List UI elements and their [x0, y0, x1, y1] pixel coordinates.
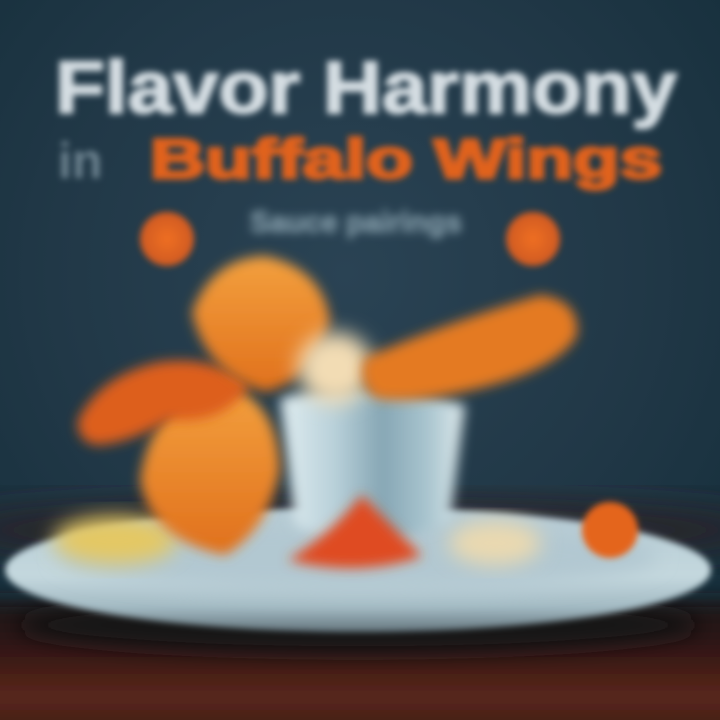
title line two: in: [58, 133, 102, 189]
title line one: Flavor Harmony: [55, 46, 677, 129]
wing lower: [140, 385, 280, 555]
wing right: [362, 295, 577, 400]
icon: right orange dot: [506, 212, 560, 266]
orange garnish: [582, 502, 638, 558]
plate: [5, 508, 711, 653]
title line two: Buffalo Wings: [150, 127, 662, 190]
yellow sauce: [53, 516, 177, 564]
icon: left orange dot: [140, 212, 194, 266]
cream sauce: [449, 521, 541, 565]
table: [0, 600, 720, 720]
wing top: [192, 256, 330, 392]
table far edge: [0, 502, 720, 558]
dip cup: [280, 388, 465, 541]
subtitle: Sauce pairings: [250, 206, 462, 239]
red sauce: [288, 495, 422, 568]
title line two: [58, 127, 662, 190]
cream splash: [297, 332, 373, 404]
wing left: [78, 361, 250, 445]
title: [55, 46, 677, 190]
